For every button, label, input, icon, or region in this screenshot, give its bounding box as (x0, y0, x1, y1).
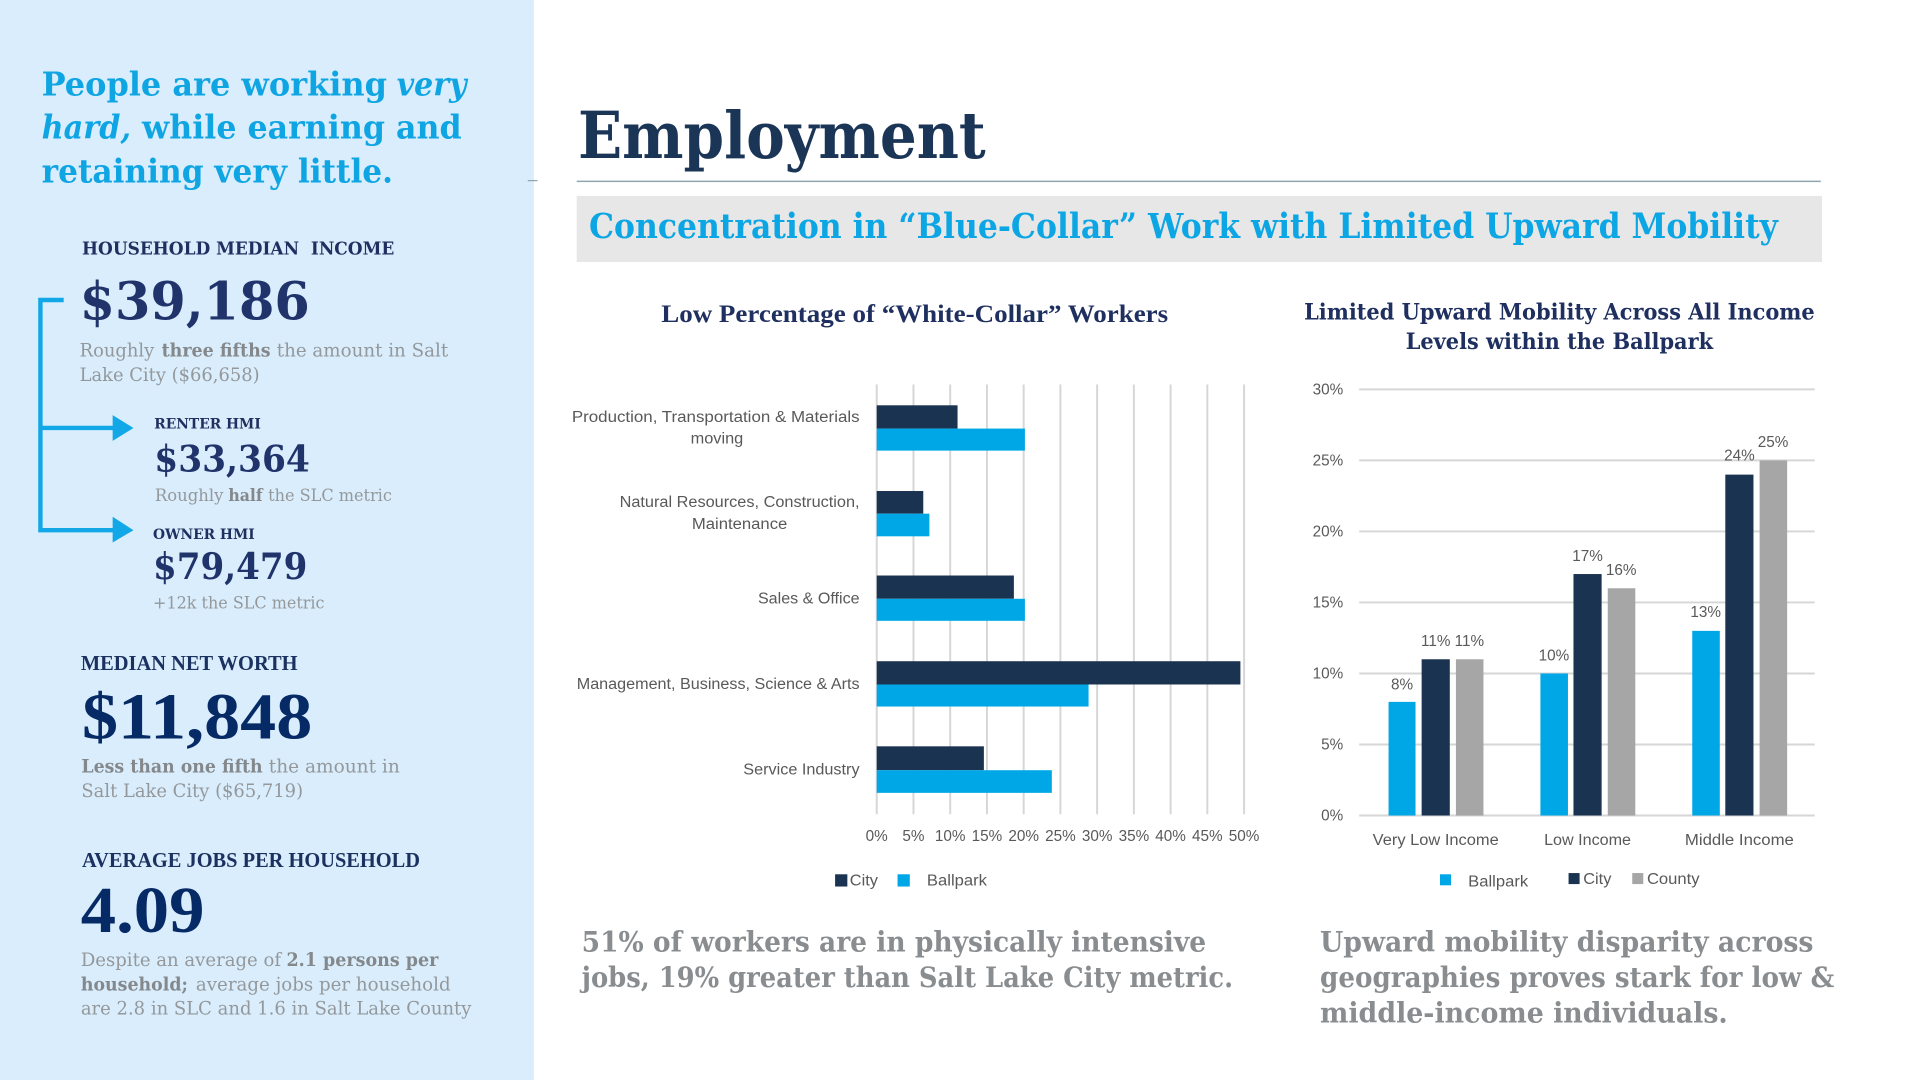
median net worth block (81, 651, 400, 802)
panel: upward mobility chart (1304, 300, 1815, 891)
sidebar headline: very (397, 65, 469, 104)
median net worth block: Less than one fifth (81, 756, 263, 778)
average jobs per household block: household; (81, 974, 188, 996)
sidebar headline: while earning and (141, 107, 462, 146)
value labels: 16% (1606, 562, 1637, 579)
axis tick labels: 15% (972, 828, 1003, 845)
chart legend: Ballpark (927, 872, 987, 889)
category labels (572, 409, 860, 778)
panel: key statistics sidebar (0, 0, 538, 1080)
household median income block: the amount in Salt (277, 339, 449, 361)
category labels: Service Industry (743, 761, 860, 778)
category labels: Maintenance (692, 516, 787, 533)
chart legend: Ballpark (1468, 874, 1528, 891)
category labels: Management, Business, Science & Arts (577, 676, 860, 693)
sidebar headline: retaining very little. (42, 151, 393, 190)
owner HMI block (153, 527, 324, 614)
average jobs per household block: 4.09 (81, 874, 204, 947)
y axis labels: 20% (1313, 523, 1344, 540)
chart legend: City (1583, 871, 1611, 888)
y axis labels: 25% (1313, 452, 1344, 469)
value labels: 13% (1690, 604, 1721, 621)
chart legend (835, 872, 987, 889)
bar chart: occupation shares (572, 384, 1260, 845)
average jobs per household block: 2.1 persons per (287, 949, 439, 971)
category labels: Sales & Office (758, 591, 860, 608)
value labels: 10% (1539, 648, 1570, 665)
category labels: Middle Income (1685, 832, 1794, 849)
household median income block: HOUSEHOLD MEDIAN INCOME (82, 239, 394, 260)
renter HMI block (154, 417, 392, 506)
bar chart: mobility by income level (1313, 381, 1815, 849)
value labels: 25% (1758, 434, 1789, 451)
axis tick labels: 45% (1192, 828, 1223, 845)
axis tick labels: 20% (1008, 828, 1039, 845)
axis tick labels: 0% (866, 828, 888, 845)
axis tick labels: 5% (902, 828, 925, 845)
average jobs per household block: average jobs per household (196, 974, 451, 996)
sidebar headline: hard, (42, 107, 131, 146)
chart heading: Low Percentage of “White-Collar” Workers (661, 301, 1168, 328)
household median income block: three fifths (162, 339, 271, 361)
takeaway: upward mobility disparity: Upward mobility disparity across (1320, 925, 1813, 958)
takeaway: physically intensive jobs (579, 925, 1233, 994)
axis tick labels: 25% (1045, 828, 1076, 845)
sidebar headline (42, 65, 469, 190)
y axis labels: 15% (1313, 594, 1344, 611)
renter HMI block: the SLC metric (268, 486, 392, 506)
takeaway: upward mobility disparity: middle-income individuals. (1320, 996, 1728, 1029)
panel: white-collar workers chart (572, 301, 1260, 889)
value labels: 17% (1572, 548, 1603, 565)
chart heading: Levels within the Ballpark (1406, 329, 1714, 355)
connector arrows from household income to renter and owner (40, 300, 133, 542)
owner HMI block: OWNER HMI (153, 527, 255, 543)
household median income block: Lake City ($66,658) (80, 364, 260, 386)
average jobs per household block: Despite an average of (81, 949, 283, 971)
value labels: 11% (1421, 633, 1451, 650)
y axis labels: 0% (1321, 807, 1344, 824)
subtitle band: Concentration in “Blue-Collar” Work with Limited Upward Mobility (589, 206, 1780, 247)
value labels: 11% (1455, 633, 1485, 650)
category labels: Very Low Income (1373, 832, 1499, 849)
y axis labels: 30% (1313, 381, 1344, 398)
median net worth block: $11,848 (82, 680, 312, 753)
median net worth block: MEDIAN NET WORTH (81, 651, 298, 675)
title: Employment (578, 98, 986, 174)
y axis labels: 10% (1313, 665, 1344, 682)
axis tick labels: 35% (1119, 828, 1150, 845)
takeaway: upward mobility disparity (1320, 925, 1834, 1029)
subtitle band (577, 196, 1822, 262)
renter HMI block: $33,364 (154, 437, 310, 480)
axis tick labels: 50% (1229, 828, 1260, 845)
y axis labels (1313, 381, 1344, 824)
chart heading (1304, 300, 1815, 355)
value labels (1391, 434, 1789, 693)
category labels: moving (691, 430, 743, 447)
owner HMI block: +12k the SLC metric (153, 594, 324, 614)
takeaway: physically intensive jobs: jobs, 19% greater than Salt Lake City metric. (579, 961, 1233, 994)
category labels: Low Income (1544, 832, 1631, 849)
value labels: 8% (1391, 676, 1413, 693)
takeaway: physically intensive jobs: 51% of workers are in physically intensive (582, 925, 1206, 958)
household median income block: Roughly (80, 339, 155, 361)
category labels: Production, Transportation & Materials (572, 409, 860, 426)
axis tick labels (866, 828, 1260, 845)
average jobs per household block (81, 848, 472, 1019)
owner HMI block: $79,479 (153, 545, 307, 588)
median net worth block: the amount in (269, 756, 400, 778)
median net worth block: Salt Lake City ($65,719) (81, 780, 303, 802)
sidebar headline: People are working (42, 65, 387, 104)
chart legend (1440, 871, 1700, 891)
renter HMI block: RENTER HMI (154, 417, 261, 433)
average jobs per household block: AVERAGE JOBS PER HOUSEHOLD (82, 848, 420, 872)
takeaway: upward mobility disparity: geographies proves stark for low & (1320, 961, 1834, 994)
value labels: 24% (1724, 447, 1755, 464)
chart legend: City (850, 872, 878, 889)
axis tick labels: 30% (1082, 828, 1113, 845)
axis tick labels: 40% (1155, 828, 1186, 845)
average jobs per household block: are 2.8 in SLC and 1.6 in Salt Lake County (81, 997, 472, 1019)
category labels (1373, 832, 1794, 849)
chart heading: Limited Upward Mobility Across All Income (1304, 300, 1815, 326)
renter HMI block: half (228, 486, 264, 506)
category labels: Natural Resources, Construction, (620, 494, 860, 511)
chart legend: County (1647, 871, 1700, 888)
household median income block (80, 239, 449, 386)
axis tick labels: 10% (935, 828, 966, 845)
household median income block: $39,186 (80, 272, 310, 333)
y axis labels: 5% (1321, 736, 1344, 753)
renter HMI block: Roughly (155, 486, 224, 506)
